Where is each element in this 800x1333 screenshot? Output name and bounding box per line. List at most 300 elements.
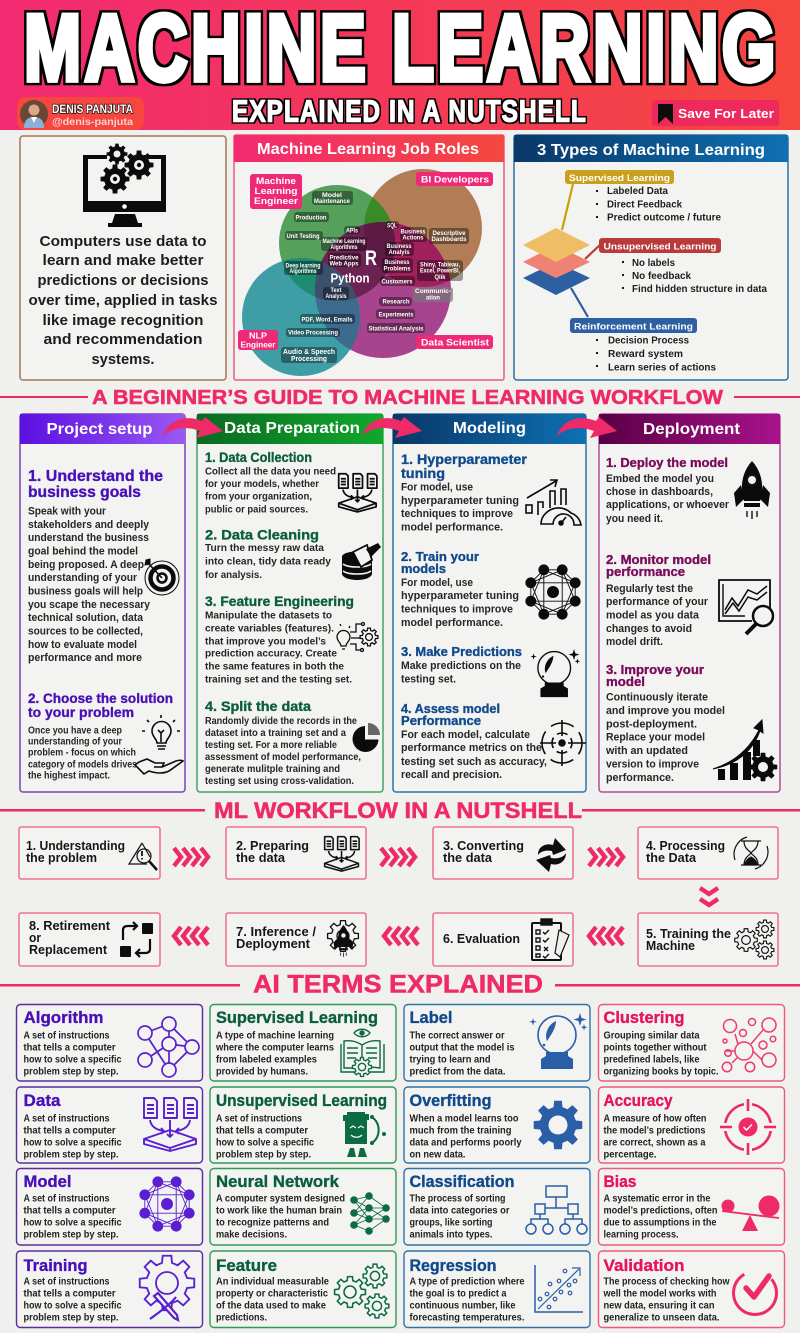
chevrons 6: [174, 927, 208, 945]
panel title: Machine Learning Job Roles: [257, 141, 479, 158]
author badge: [17, 97, 144, 130]
workflow step 4: 4. Processing: [646, 839, 725, 853]
step: assess model performance: Performance: [401, 713, 481, 728]
card: unsupervised learning: A set of instructions: [216, 1114, 302, 1124]
icon: gears: [335, 1264, 389, 1318]
card: model: Model: [24, 1172, 72, 1191]
venn labels: Experiments: [378, 312, 414, 318]
column title: Modeling: [453, 420, 526, 437]
role tag: BI developers: BI Developers: [421, 174, 489, 186]
icon: brush: [342, 543, 381, 580]
venn labels: Business: [400, 228, 426, 236]
step: assess model performance: performance metrics on the: [401, 742, 542, 754]
column header: [393, 414, 586, 444]
card: neural network: [210, 1168, 396, 1245]
workflow step 7: Deployment: [236, 937, 311, 951]
card: label: output that the model is: [410, 1042, 515, 1054]
step: improve your model: and improve you model: [606, 705, 725, 717]
venn labels: Descriptive: [432, 230, 466, 237]
avatar: [20, 100, 48, 128]
workflow step 5: Machine: [646, 939, 695, 953]
venn labels: Communic-: [415, 288, 451, 295]
column header: [599, 414, 780, 444]
role tag: data scientist: [416, 335, 493, 349]
card: regression: [404, 1251, 590, 1328]
workflow step 2: [226, 827, 366, 879]
workflow step 6: 6. Evaluation: [443, 932, 520, 946]
icon: model network: [139, 1176, 195, 1232]
card: classification: [404, 1168, 590, 1245]
step heading: [28, 690, 173, 720]
chevrons 2: [381, 848, 415, 866]
step: assess model performance: [401, 701, 547, 781]
arrow: preparation to modeling: [362, 417, 422, 438]
step: make predictions: 3. Make Predictions: [401, 644, 522, 659]
step: data collection: for your models, whether: [205, 479, 319, 490]
card: regression: continuous number, like: [410, 1300, 516, 1312]
icon: bookmark: [658, 104, 673, 124]
card: clustering: [598, 1004, 784, 1081]
card: neural network: make decisions.: [216, 1230, 287, 1240]
venn labels: Unit Testing: [286, 233, 320, 240]
card: overfitting: When a model learns too: [410, 1114, 518, 1124]
step: feature engineering: the same features in both the: [205, 662, 344, 672]
card: unsupervised learning: problem step by step.: [216, 1150, 311, 1160]
card: bias: due to assumptions in the: [604, 1218, 717, 1228]
panel title: 3 Types of Machine Learning: [537, 142, 765, 159]
card: validation: The process of checking how: [604, 1276, 730, 1288]
step body: technical solution, data: [28, 612, 144, 624]
step heading: business goals: [28, 484, 141, 501]
icon: computer with gears: [83, 144, 166, 227]
step: improve your model: Continuously iterate: [606, 692, 708, 704]
card: feature: An individual measurable: [216, 1276, 329, 1288]
icon: data: [325, 837, 359, 871]
role tag: machine learning engineer: [250, 174, 302, 209]
chevrons 4: [589, 927, 623, 945]
step body: how to evaluate model: [28, 639, 137, 651]
venn labels: Python: [330, 272, 370, 286]
intro text: Computers use data to: [40, 233, 206, 250]
card: algorithm: that tells a computer: [24, 1042, 116, 1054]
card: bias: A systematic error in the: [604, 1194, 711, 1204]
card: validation: well the model works with: [603, 1288, 716, 1300]
card: model: how to solve a specific: [24, 1218, 122, 1228]
step: monitor model performance: 2. Monitor model: [606, 552, 711, 567]
venn labels: Maintenance: [314, 198, 350, 205]
card: regression: A type of prediction where: [410, 1276, 525, 1288]
venn labels: Research: [382, 298, 410, 306]
layered diamonds: [523, 228, 590, 295]
role tag: machine learning engineer: Engineer: [254, 196, 298, 207]
reinforcement learning: [570, 318, 717, 374]
step: assess model performance: testing set such as accuracy,: [401, 756, 547, 768]
step: improve your model: model: [606, 674, 645, 689]
card: training: A set of instructions: [24, 1276, 110, 1288]
icon: gears: [735, 920, 774, 959]
card: supervised learning: A type of machine learning: [216, 1030, 334, 1042]
panel: modeling: [393, 414, 586, 792]
step body: sources to be collected,: [28, 626, 143, 638]
card: validation: generalize to unseen data.: [604, 1312, 720, 1324]
venn labels: Shiny, Tableau,: [420, 262, 460, 268]
icon: hyperparameter tuning: [526, 480, 581, 525]
card: classification: data into categories or: [410, 1206, 510, 1216]
icon: book with eye: [341, 1029, 384, 1076]
step body: [28, 726, 137, 782]
card: feature: predictions.: [216, 1312, 267, 1324]
venn labels: Problems: [384, 266, 411, 272]
step: make predictions: Make predictions on the: [401, 660, 521, 672]
save label: Save For Later: [678, 106, 774, 121]
card: accuracy: A measure of how often: [604, 1114, 706, 1124]
venn labels: Video Processing: [288, 330, 338, 336]
intro text: and recommendation: [44, 331, 203, 348]
icon: warning magnifier: [129, 843, 157, 870]
venn labels: Model: [322, 192, 342, 199]
card: supervised learning: [210, 1004, 396, 1081]
icon: accuracy target: [720, 1099, 776, 1155]
icon: robot head: [343, 1112, 386, 1157]
icon: neural network: [525, 564, 581, 620]
icon: regression scatter: [535, 1265, 583, 1312]
step: hyperparameter tuning: 1. Hyperparameter: [401, 451, 528, 467]
card: overfitting: data and performs poorly: [410, 1138, 522, 1148]
venn labels: Text: [330, 287, 342, 294]
panel header: [234, 135, 504, 162]
workflow step 5: 5. Training the: [646, 927, 731, 941]
intro text: like image recognition: [42, 312, 204, 329]
card: label: trying to learn and: [410, 1054, 490, 1066]
step: make predictions: testing set.: [401, 674, 456, 686]
step heading: [28, 468, 163, 501]
card: algorithm: A set of instructions: [24, 1030, 110, 1042]
venn labels: Algorithms: [330, 244, 358, 251]
role tag: NLP engineer: Engineer: [240, 340, 276, 350]
card: supervised learning: provided by humans.: [216, 1066, 308, 1078]
panel: intro: [20, 136, 226, 380]
icon: crystal ball: [530, 649, 580, 697]
step: split the data: testing set. For a more reliable: [205, 740, 337, 751]
workflow step 1: 1. Understanding: [26, 839, 125, 853]
card: classification: Classification: [410, 1172, 514, 1191]
icon: rocket in gear: [328, 921, 358, 957]
venn diagram: [242, 169, 482, 376]
workflow step 2: 2. Preparing: [236, 839, 309, 853]
step body: problem - focus on which: [28, 748, 136, 758]
icon: gear with tools: [140, 1256, 194, 1320]
chevrons 3: [589, 848, 623, 866]
venn labels: Dashboards: [432, 236, 467, 243]
step heading: to your problem: [28, 704, 134, 720]
venn labels: Production: [296, 214, 326, 222]
venn labels: Predictive: [330, 254, 359, 262]
icon: solid gear: [534, 1101, 582, 1149]
step: data collection: from your organization,: [205, 492, 312, 502]
role tag: BI developers: [416, 172, 493, 186]
venn labels: Business: [386, 243, 412, 250]
card: model: problem step by step.: [24, 1230, 119, 1240]
venn labels: PDF, Word, Emails: [302, 316, 353, 324]
card: accuracy: percentage.: [604, 1150, 657, 1160]
intro text: systems.: [92, 351, 154, 368]
card: overfitting: [404, 1087, 590, 1163]
icon: data collection: [339, 474, 377, 512]
card: accuracy: [598, 1087, 784, 1163]
role tag: machine learning engineer: Machine: [256, 176, 296, 187]
card: feature: of the data used to make: [216, 1300, 326, 1312]
icon: sync arrows: [536, 838, 566, 872]
workflow step 6: [433, 913, 573, 966]
venn labels: Algorithms: [290, 268, 317, 275]
step: monitor model performance: model drift.: [606, 636, 663, 648]
panel: project setup: [20, 414, 185, 792]
icon: balance: [722, 1196, 780, 1231]
workflow step 8: or: [29, 931, 41, 945]
step: split the data: dataset into a training set and a: [205, 728, 346, 739]
step: data cleaning: [205, 526, 331, 581]
step: assess model performance: 4. Assess model: [401, 701, 500, 716]
card: data: that tells a computer: [24, 1126, 116, 1136]
card: unsupervised learning: that tells a computer: [216, 1126, 308, 1136]
card: training: that tells a computer: [24, 1288, 116, 1300]
step: improve your model: 3. Improve your: [606, 662, 704, 677]
venn labels: Customers: [382, 278, 413, 286]
step: make predictions: [401, 644, 522, 686]
unsupervised learning: Unsupervised Learning: [604, 242, 717, 252]
step: train your models: techniques to improve: [401, 604, 513, 616]
venn labels: Analysis: [326, 293, 347, 300]
icon: clipboard: [532, 919, 569, 960]
venn labels: Excel, PowerBI,: [420, 268, 460, 274]
icon: check circle: [725, 1263, 785, 1323]
icon: monitoring chart: [719, 580, 773, 634]
card: unsupervised learning: how to solve a specific: [216, 1138, 314, 1148]
step: data cleaning: into clean, tidy data ready: [205, 556, 331, 568]
card: accuracy: are correct, shown as a: [604, 1138, 706, 1148]
card: algorithm: problem step by step.: [24, 1066, 119, 1078]
step body: you scape the necessary: [28, 599, 151, 611]
step: train your models: hyperparameter tuning: [401, 590, 519, 602]
reinforcement learning: Reward system: [608, 349, 683, 360]
role tag: NLP engineer: [238, 330, 278, 350]
step body: the highest impact.: [28, 770, 110, 782]
chevrons 1: [174, 848, 208, 866]
venn labels: [281, 191, 469, 363]
card: bias: [598, 1168, 784, 1245]
step: feature engineering: [205, 593, 354, 686]
step: train your models: [401, 549, 519, 629]
step: feature engineering: that improve you model’s: [205, 636, 326, 648]
card: accuracy: the model’s predictions: [604, 1126, 706, 1136]
workflow step 8: [19, 913, 160, 966]
step body: being proposed. A deep: [28, 559, 144, 571]
column title: Deployment: [643, 421, 741, 438]
role tag: data scientist: Data Scientist: [421, 338, 490, 348]
section heading: ML workflow: ML WORKFLOW IN A NUTSHELL: [214, 798, 582, 823]
card: validation: Validation: [604, 1256, 684, 1275]
step: split the data: testing set using cross-validation.: [205, 776, 354, 787]
icon: target: [145, 559, 179, 595]
step: data cleaning: 2. Data Cleaning: [205, 526, 319, 542]
intro text: learn and make better: [42, 252, 204, 269]
step: improve your model: post-deployment.: [606, 718, 697, 730]
step: improve your model: performance.: [606, 772, 674, 784]
step body: stakeholders and deeply: [28, 519, 150, 531]
card: label: predict from the data.: [410, 1066, 506, 1078]
venn labels: SQL: [387, 222, 397, 230]
author name: DENIS PANJUTA: [52, 104, 133, 116]
step: deploy the model: chose in dashboards,: [606, 486, 713, 498]
column header: [20, 414, 185, 444]
card: bias: Bias: [604, 1172, 636, 1191]
step: deploy the model: [606, 455, 730, 525]
icon: crystal ball: [529, 1013, 587, 1069]
supervised learning: Predict outcome / future: [607, 212, 722, 224]
card: clustering: organizing books by topic.: [604, 1066, 719, 1078]
workflow step 8: Replacement: [29, 943, 108, 957]
card: training: problem step by step.: [24, 1312, 119, 1324]
step: split the data: 4. Split the data: [205, 698, 311, 714]
venn labels: Processing: [291, 356, 327, 363]
step: feature engineering: 3. Feature Engineering: [205, 593, 354, 609]
step: feature engineering: Manipulate the datasets to: [205, 610, 332, 622]
unsupervised learning: Find hidden structure in data: [632, 284, 768, 295]
card: algorithm: [16, 1004, 202, 1081]
workflow step 3: [433, 827, 573, 879]
card: model: that tells a computer: [24, 1206, 116, 1216]
step: improve your model: version to improve: [606, 758, 699, 770]
card: clustering: Grouping similar data: [604, 1030, 700, 1042]
step: train your models: For model, use: [401, 577, 473, 589]
step: data collection: 1. Data Collection: [205, 450, 312, 465]
card: label: The correct answer or: [410, 1030, 505, 1042]
supervised learning: Supervised Learning: [569, 173, 670, 184]
venn labels: Web Apps: [330, 260, 359, 268]
card: regression: forecasting temperatures.: [410, 1312, 525, 1324]
author handle: @denis-panjuta: [52, 117, 133, 128]
column title: Project setup: [46, 421, 153, 438]
step body: performance and more: [28, 652, 142, 664]
card: overfitting: on new data.: [410, 1150, 466, 1160]
card: bias: learning process.: [604, 1230, 679, 1240]
venn labels: Deep learning: [286, 262, 320, 270]
icon: growth with gear: [713, 720, 777, 781]
icon: classification tree: [526, 1186, 587, 1234]
card: regression: the goal is to predict a: [410, 1288, 507, 1300]
step body: business goals will help: [28, 586, 143, 598]
step: data collection: public or paid sources.: [205, 504, 308, 516]
card: training: [16, 1251, 202, 1328]
card: feature: [210, 1251, 396, 1328]
panel: deployment: [599, 414, 780, 792]
step: monitor model performance: performance: [606, 564, 685, 579]
step: hyperparameter tuning: tuning: [401, 465, 445, 481]
card: overfitting: Overfitting: [410, 1091, 492, 1110]
card: clustering: points together without: [604, 1042, 707, 1054]
card: algorithm: how to solve a specific: [24, 1054, 122, 1066]
step: train your models: model performance.: [401, 617, 503, 629]
header band: [0, 0, 800, 130]
step: monitor model performance: changes to avoid: [606, 623, 692, 635]
step: split the data: assessment of model performance,: [205, 752, 361, 763]
intro text: over time, applied in tasks: [28, 292, 218, 309]
card: label: [404, 1004, 590, 1081]
venn labels: Business: [384, 259, 410, 266]
column title: Data Preparation: [224, 420, 360, 437]
reinforcement learning: Reinforcement Learning: [574, 322, 693, 332]
step: train your models: 2. Train your: [401, 549, 479, 564]
step: hyperparameter tuning: For model, use: [401, 482, 473, 494]
venn labels: Qlik: [434, 274, 446, 281]
chevrons down: [700, 888, 718, 905]
step: improve your model: with an updated: [605, 745, 688, 757]
step: split the data: [205, 698, 361, 787]
step: hyperparameter tuning: techniques to improve: [401, 508, 513, 520]
step heading: 2. Choose the solution: [28, 690, 173, 706]
workflow step 7: [226, 913, 366, 966]
column header: [197, 414, 383, 444]
chevrons 5: [384, 927, 418, 945]
step: monitor model performance: [606, 552, 711, 648]
step: assess model performance: recall and precision.: [401, 769, 502, 781]
step body: Once you have a deep: [28, 726, 122, 736]
section heading: beginner's guide: A BEGINNER’S GUIDE TO MACHINE LEARNING WORKFLOW: [92, 387, 723, 409]
supervised learning: [565, 170, 722, 224]
card: bias: model’s predictions, often: [604, 1206, 718, 1216]
icon: hourglass: [734, 837, 768, 869]
card: clustering: predefined labels, like: [604, 1054, 700, 1066]
step: improve your model: [605, 662, 725, 784]
supervised learning: Direct Feedback: [607, 200, 683, 210]
reinforcement learning: Learn series of actions: [608, 362, 717, 374]
venn labels: Actions: [402, 234, 424, 242]
step: data collection: Collect all the data you need: [205, 466, 336, 478]
step: feature engineering: prediction accuracy. Create: [205, 648, 337, 660]
card: data: A set of instructions: [24, 1114, 110, 1124]
step: train your models: models: [401, 561, 446, 576]
card: label: Label: [410, 1008, 452, 1027]
card: data: problem step by step.: [24, 1150, 119, 1160]
icon: rocket: [734, 461, 770, 519]
intro text: predictions or decisions: [38, 272, 208, 289]
reinforcement learning: Decision Process: [608, 336, 690, 346]
venn labels: Statistical Analysis: [368, 326, 424, 332]
step: monitor model performance: model as you data: [606, 610, 700, 622]
venn labels: APIs: [346, 228, 358, 234]
step: feature engineering: create variables (features).: [205, 624, 334, 634]
card: regression: Regression: [410, 1256, 496, 1275]
workflow step 4: [638, 827, 778, 879]
step: deploy the model: you need it.: [606, 513, 663, 525]
card: validation: [598, 1251, 785, 1328]
panel: job roles: [234, 135, 504, 380]
card: neural network: Neural Network: [216, 1172, 340, 1191]
step body: understanding of your: [28, 736, 122, 748]
card: model: [16, 1168, 202, 1245]
role tag: machine learning engineer: Learning: [254, 186, 298, 197]
unsupervised learning: No labels: [632, 258, 676, 269]
card: neural network: A computer system designed: [216, 1194, 345, 1204]
card: classification: groups, like sorting: [410, 1218, 492, 1228]
step body: Speak with your: [28, 506, 107, 518]
step: monitor model performance: performance of your: [606, 596, 709, 608]
card: supervised learning: from labeled examples: [216, 1054, 317, 1066]
step body: category of models drives: [28, 760, 137, 770]
step: deploy the model: applications, or whoever: [606, 499, 730, 511]
connector lines: [562, 184, 602, 317]
card: training: Training: [24, 1256, 88, 1275]
